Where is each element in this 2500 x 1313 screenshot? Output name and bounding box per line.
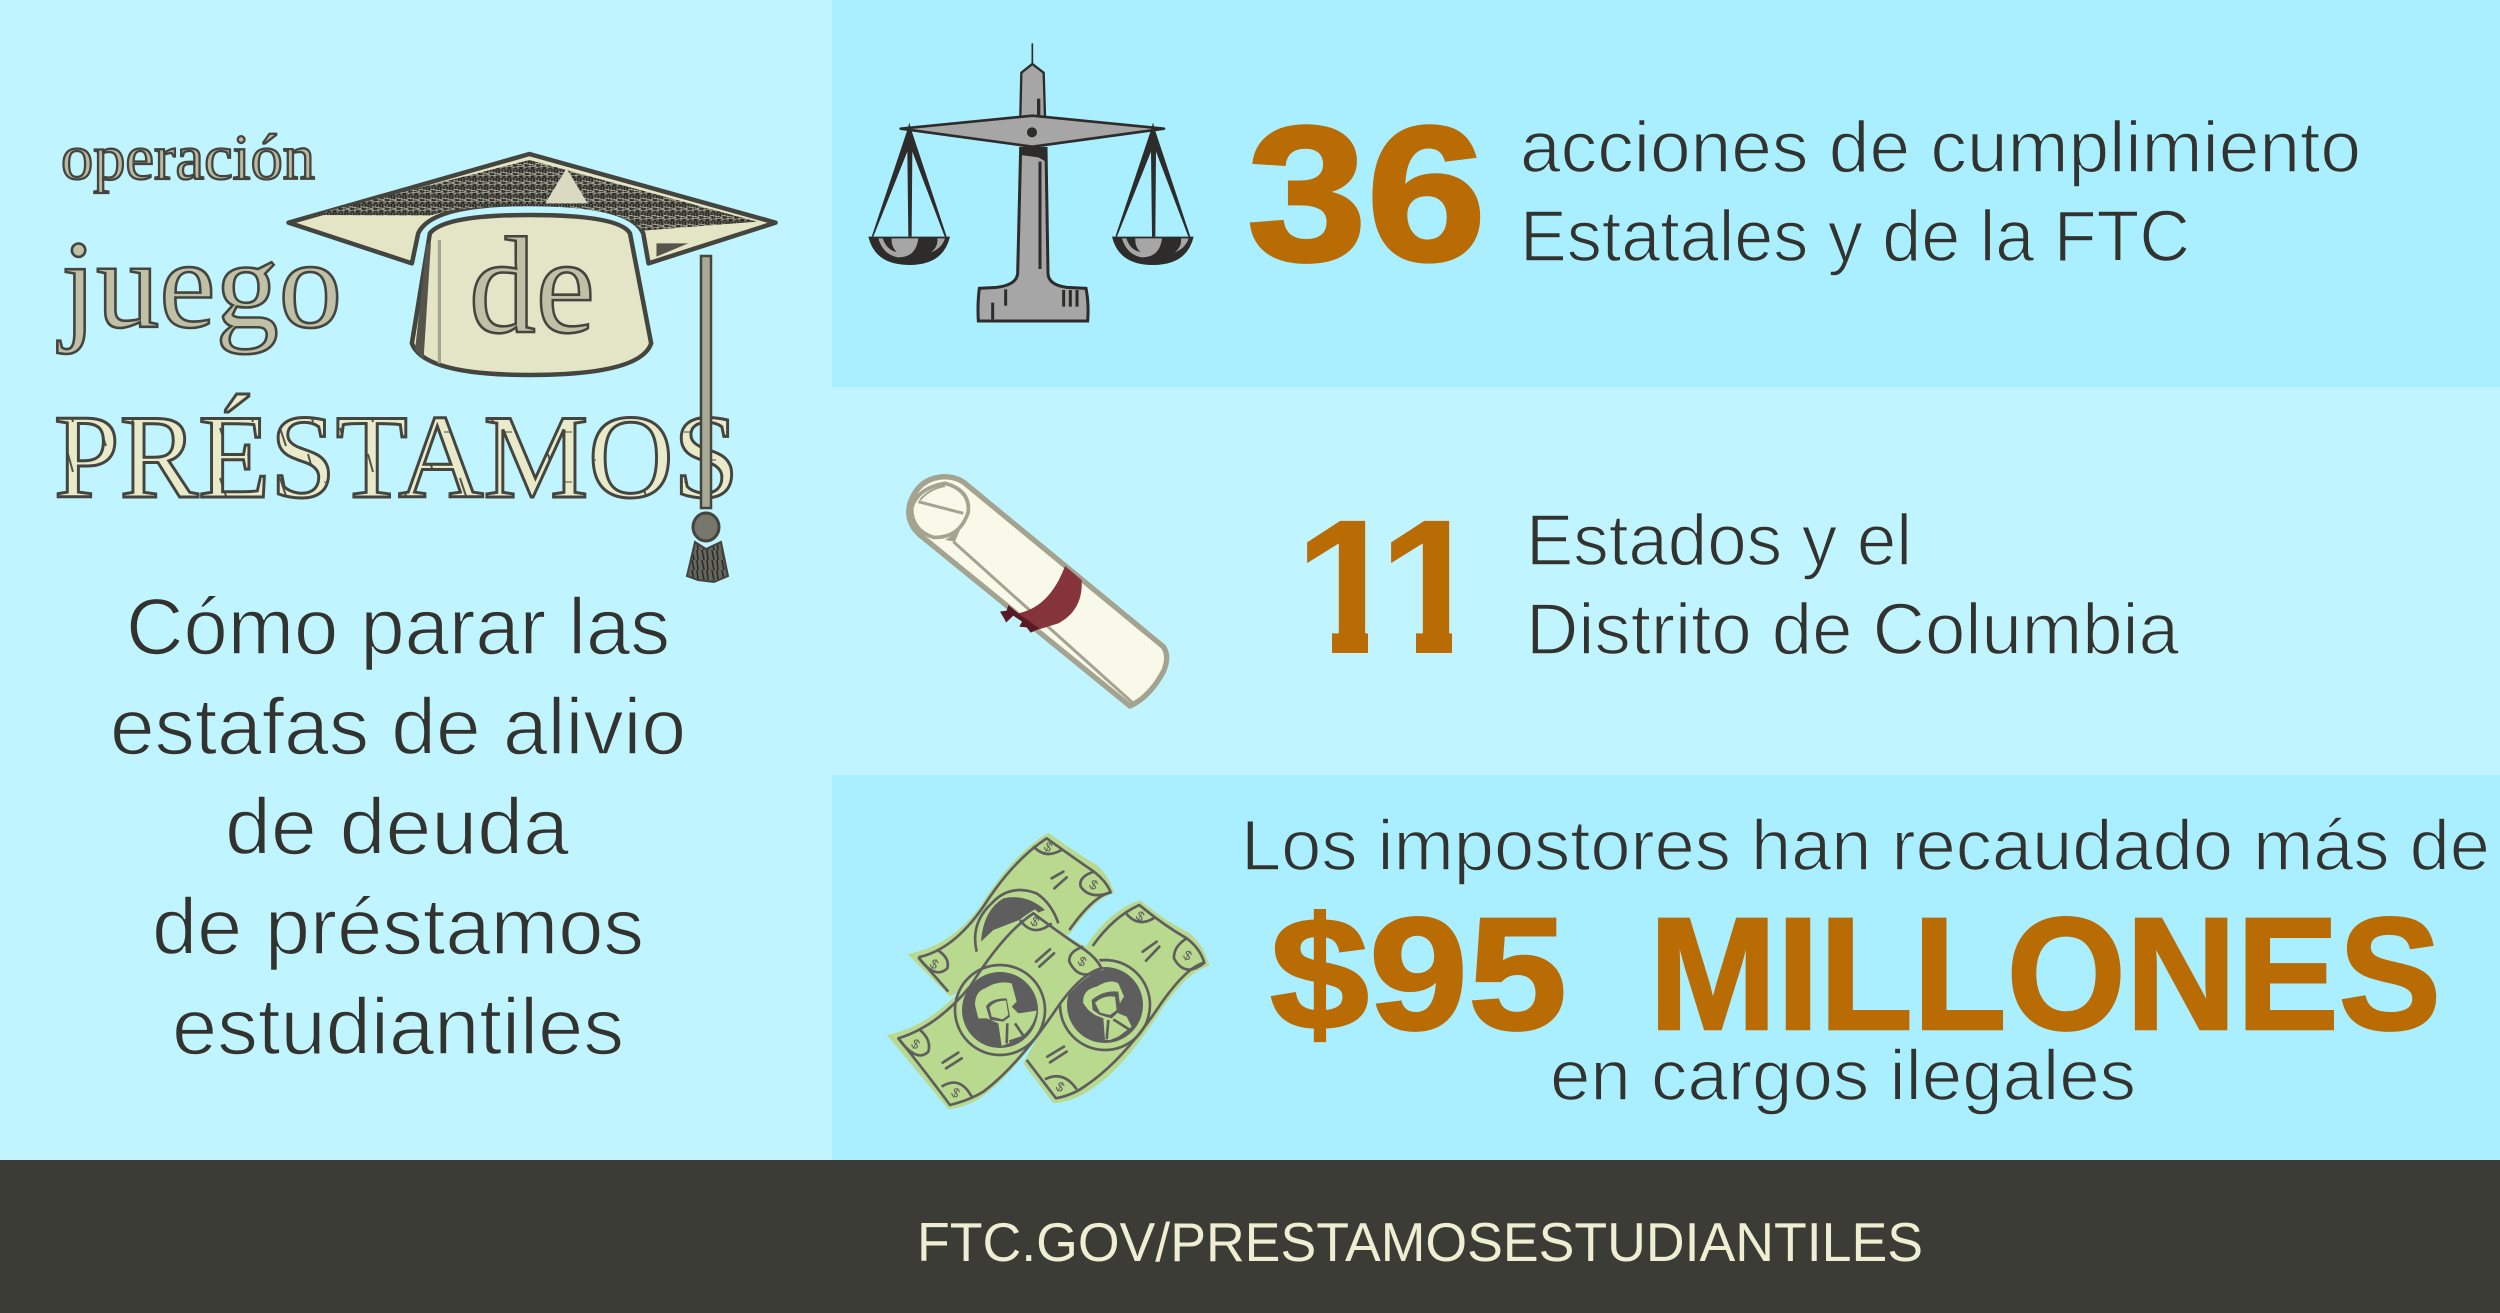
right pan (1112, 123, 1194, 265)
icon: dollar bills (887, 833, 1209, 1109)
scale tower (1020, 64, 1045, 117)
footer url: FTC.GOV/PRESTAMOSESTUDIANTILES (917, 1211, 1923, 1273)
unit: MILLONES (1649, 884, 2441, 1063)
front bill: $ (909, 1036, 923, 1053)
icon: diploma scroll (909, 477, 1167, 706)
panel: 36 actions (832, 0, 2500, 387)
scale pivot (1027, 127, 1037, 137)
stat: 36: 36 (1247, 86, 1486, 301)
icon: graduation cap (289, 154, 776, 375)
ribbon (1018, 566, 1082, 629)
back bill left: $ (927, 956, 942, 973)
icon: scales of justice (868, 43, 1194, 321)
back bill right: $ (1181, 947, 1195, 964)
logo: operación juego de préstamos (54, 122, 776, 582)
line 2: Distrito de Columbia (1526, 590, 2180, 670)
scale marks (993, 162, 1077, 319)
front bill: $ (1075, 953, 1090, 970)
tassel knob (693, 513, 719, 541)
ribbon tails (1000, 605, 1041, 633)
cap board texture (312, 160, 757, 231)
scroll end (912, 483, 968, 537)
cap body shading (415, 243, 431, 360)
back bill right: $ (1133, 908, 1148, 925)
back bill left: $ (1041, 838, 1056, 855)
text block: 11 description (1526, 501, 2180, 670)
line 1: Cómo parar las (126, 582, 670, 671)
cap board (289, 154, 776, 263)
front bill (887, 909, 1103, 1109)
scroll end line (918, 502, 963, 513)
logo word: juego: juego (57, 216, 342, 355)
line 1: Estados y el (1526, 501, 1912, 581)
front bill: $ (1028, 913, 1042, 930)
scale beam (901, 116, 1164, 147)
logo word: de: de (469, 209, 595, 362)
cap body fold line (436, 240, 442, 363)
text: in illegal charges: en cargos ilegales (1550, 1037, 2136, 1116)
stat: 11: 11 (1294, 479, 1485, 694)
cap body (412, 215, 651, 375)
left pan (868, 123, 950, 265)
back bill right (1023, 900, 1209, 1103)
line 2: estafas de alivio (110, 682, 686, 771)
back bill left (907, 833, 1114, 997)
scroll corner (945, 530, 960, 542)
line 1: acciones de cumplimiento (1520, 108, 2361, 188)
back bill right: $ (1053, 1078, 1068, 1095)
line 5: estudiantiles (172, 982, 624, 1071)
scale tower mark (1037, 99, 1040, 116)
scroll arc (920, 486, 945, 500)
back bill left: $ (1087, 876, 1101, 893)
text: impostors raised more than: Los impostores han recaudado más de (1241, 807, 2490, 886)
line 3: de deuda (225, 782, 570, 871)
scale spike (1030, 43, 1035, 65)
panel: 95 million (832, 775, 2500, 1160)
text block: 36 description (1520, 108, 2361, 277)
scroll lower edge (953, 542, 1133, 703)
stat: 95 million (1270, 884, 2441, 1063)
tassel (687, 542, 728, 582)
logo word: PRÉSTAMOS: PRÉSTAMOS (54, 390, 739, 523)
amount: $95 (1270, 884, 1567, 1063)
line 2: Estatales y de la FTC (1520, 197, 2190, 277)
tassel cord (701, 256, 711, 508)
panel: footer bar (0, 1160, 2500, 1313)
cap board corner (656, 243, 688, 257)
scale column (978, 148, 1088, 321)
cap board highlight (545, 168, 588, 203)
panel: 11 states (832, 387, 2500, 775)
scale wedge (1021, 147, 1046, 162)
logo word: operación: operación (61, 122, 315, 194)
scroll body (909, 477, 1167, 706)
text block: left description (110, 582, 686, 1071)
panel: left background (0, 0, 832, 1160)
line 4: de préstamos (152, 882, 644, 971)
front bill: $ (949, 1084, 963, 1101)
